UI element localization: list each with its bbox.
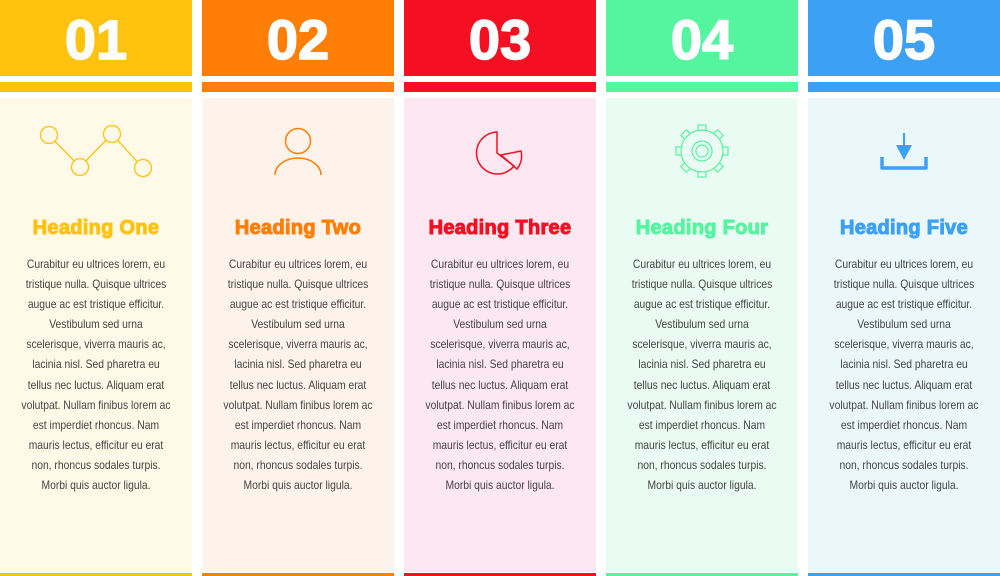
number 03: 03 (469, 8, 531, 71)
body text 1: lacinia nisl. Sed pharetra eu (32, 357, 160, 371)
icon: download (880, 133, 928, 170)
number 01 (0, 0, 192, 76)
panel 3 (404, 98, 596, 572)
body text 2: Curabitur eu ultrices lorem, eu (229, 257, 367, 271)
body text 5: lacinia nisl. Sed pharetra eu (840, 357, 968, 371)
body text 1: volutpat. Nullam finibus lorem ac (21, 398, 171, 412)
body text 5: scelerisque, viverra mauris ac, (834, 337, 974, 351)
body text 5: volutpat. Nullam finibus lorem ac (829, 398, 979, 412)
body text 4 (627, 257, 777, 492)
panel 1 (0, 98, 192, 572)
body text 2: volutpat. Nullam finibus lorem ac (223, 398, 373, 412)
body text 4: tristique nulla. Quisque ultrices (632, 277, 772, 291)
body text 4: est imperdiet rhoncus. Nam (639, 418, 765, 432)
body text 4: augue ac est tristique efficitur. (634, 297, 770, 311)
body text 2: lacinia nisl. Sed pharetra eu (234, 357, 362, 371)
body text 3: scelerisque, viverra mauris ac, (430, 337, 570, 351)
body text 5: est imperdiet rhoncus. Nam (841, 418, 967, 432)
body text 5: Morbi quis auctor ligula. (849, 478, 958, 492)
panel 2 (202, 98, 394, 572)
body text 1: non, rhoncus sodales turpis. (31, 458, 161, 472)
number 03 (404, 0, 596, 76)
body text 3: mauris lectus, efficitur eu erat (433, 438, 567, 452)
body text 2: scelerisque, viverra mauris ac, (228, 337, 368, 351)
body text 4: Vestibulum sed urna (655, 317, 749, 331)
icon: user (274, 128, 322, 175)
body text 4: non, rhoncus sodales turpis. (637, 458, 767, 472)
body text 1: tellus nec luctus. Aliquam erat (28, 378, 164, 392)
body text 4: Curabitur eu ultrices lorem, eu (633, 257, 771, 271)
body text 3: Vestibulum sed urna (453, 317, 547, 331)
body text 2: augue ac est tristique efficitur. (230, 297, 366, 311)
number 05 (808, 0, 1000, 76)
body text 2: est imperdiet rhoncus. Nam (235, 418, 361, 432)
heading two: Heading Two (235, 217, 361, 239)
body text 5: non, rhoncus sodales turpis. (839, 458, 969, 472)
number 01: 01 (65, 8, 127, 71)
body text 1 (21, 257, 171, 492)
column 1 (0, 0, 192, 576)
column 3 (404, 0, 596, 576)
body text 4: volutpat. Nullam finibus lorem ac (627, 398, 777, 412)
body text 2: Vestibulum sed urna (251, 317, 345, 331)
body text 1: Curabitur eu ultrices lorem, eu (27, 257, 165, 271)
body text 5 (829, 257, 979, 492)
body text 3: lacinia nisl. Sed pharetra eu (436, 357, 564, 371)
body text 4: tellus nec luctus. Aliquam erat (634, 378, 770, 392)
icon: pie chart (476, 131, 522, 175)
number 04: 04 (671, 8, 733, 71)
number 05: 05 (873, 8, 935, 71)
column 2 (202, 0, 394, 576)
body text 5: tristique nulla. Quisque ultrices (834, 277, 974, 291)
body text 2: Morbi quis auctor ligula. (243, 478, 352, 492)
body text 5: tellus nec luctus. Aliquam erat (836, 378, 972, 392)
body text 4: scelerisque, viverra mauris ac, (632, 337, 772, 351)
body text 1: augue ac est tristique efficitur. (28, 297, 164, 311)
body text 5: augue ac est tristique efficitur. (836, 297, 972, 311)
heading four: Heading Four (636, 217, 768, 239)
body text 2: non, rhoncus sodales turpis. (233, 458, 363, 472)
column 5 (808, 0, 1000, 576)
body text 1: mauris lectus, efficitur eu erat (29, 438, 163, 452)
number 02: 02 (267, 8, 329, 71)
body text 1: tristique nulla. Quisque ultrices (26, 277, 166, 291)
body text 4: mauris lectus, efficitur eu erat (635, 438, 769, 452)
body text 5: mauris lectus, efficitur eu erat (837, 438, 971, 452)
number 02 (202, 0, 394, 76)
panel 4 (606, 98, 798, 572)
body text 2 (223, 257, 373, 492)
body text 3: tellus nec luctus. Aliquam erat (432, 378, 568, 392)
icon: network line (40, 124, 152, 178)
body text 4: Morbi quis auctor ligula. (647, 478, 756, 492)
body text 3: tristique nulla. Quisque ultrices (430, 277, 570, 291)
heading five: Heading Five (840, 217, 968, 239)
body text 3: volutpat. Nullam finibus lorem ac (425, 398, 575, 412)
heading three: Heading Three (429, 217, 571, 239)
column 4 (606, 0, 798, 576)
body text 3: augue ac est tristique efficitur. (432, 297, 568, 311)
body text 1: Morbi quis auctor ligula. (41, 478, 150, 492)
heading one: Heading One (33, 217, 159, 239)
body text 2: tellus nec luctus. Aliquam erat (230, 378, 366, 392)
body text 2: tristique nulla. Quisque ultrices (228, 277, 368, 291)
body text 3: Morbi quis auctor ligula. (445, 478, 554, 492)
body text 1: scelerisque, viverra mauris ac, (26, 337, 166, 351)
body text 5: Curabitur eu ultrices lorem, eu (835, 257, 973, 271)
body text 3: Curabitur eu ultrices lorem, eu (431, 257, 569, 271)
body text 3 (425, 257, 575, 492)
icon: gear (675, 124, 729, 178)
body text 1: est imperdiet rhoncus. Nam (33, 418, 159, 432)
body text 2: mauris lectus, efficitur eu erat (231, 438, 365, 452)
body text 5: Vestibulum sed urna (857, 317, 951, 331)
number 04 (606, 0, 798, 76)
body text 1: Vestibulum sed urna (49, 317, 143, 331)
body text 4: lacinia nisl. Sed pharetra eu (638, 357, 766, 371)
body text 3: est imperdiet rhoncus. Nam (437, 418, 563, 432)
body text 3: non, rhoncus sodales turpis. (435, 458, 565, 472)
panel 5 (808, 98, 1000, 572)
